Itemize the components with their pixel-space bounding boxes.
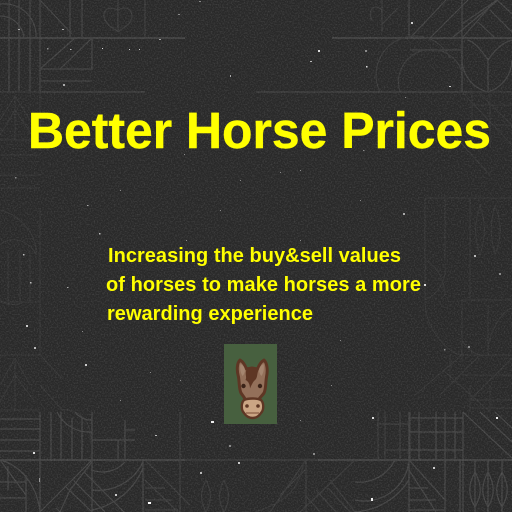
body text xyxy=(106,245,421,325)
muzzle xyxy=(242,398,263,418)
title: Better Horse Prices xyxy=(28,102,491,159)
icon: horse head xyxy=(224,344,277,424)
body text: of horses to make horses a more xyxy=(106,274,421,296)
mane xyxy=(246,367,258,388)
inner ears xyxy=(240,364,245,376)
mouth xyxy=(246,412,259,414)
body text: Increasing the buy&sell values xyxy=(108,245,401,267)
horse face xyxy=(237,360,267,401)
nostrils xyxy=(245,404,249,408)
body text: rewarding experience xyxy=(107,303,313,325)
eyes xyxy=(241,384,246,388)
